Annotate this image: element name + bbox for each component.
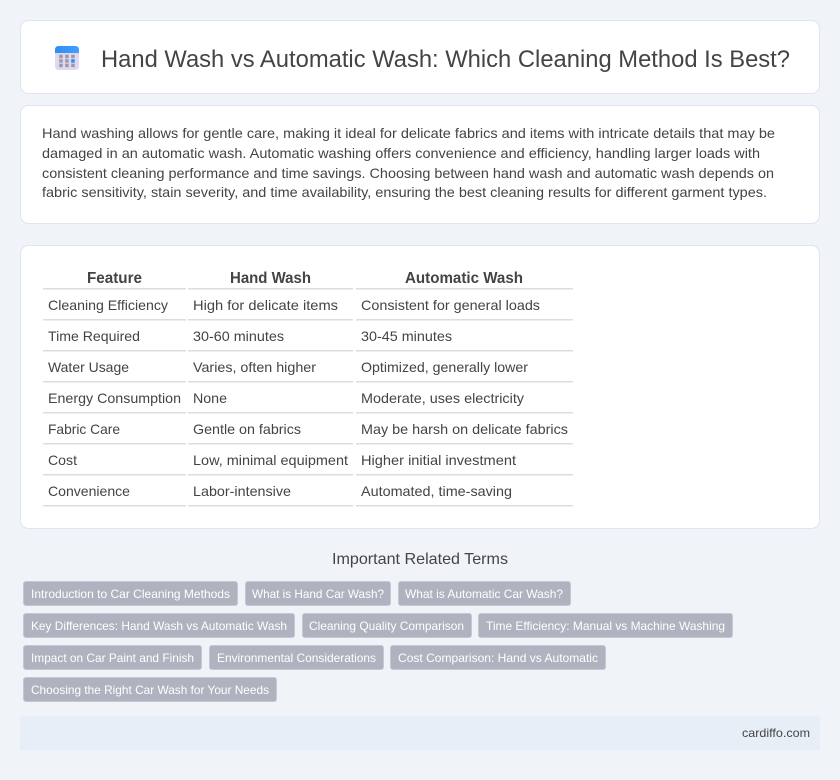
tag: Cost Comparison: Hand vs Automatic	[398, 651, 598, 665]
row: time required: 30-45 minutes	[361, 328, 452, 344]
row: convenience: Automated, time-saving	[361, 483, 512, 499]
row: cleaning efficiency: Cleaning Efficiency	[48, 297, 168, 313]
row: time required	[48, 328, 452, 344]
icon: calendar	[55, 46, 79, 70]
title: Hand Wash vs Automatic Wash: Which Cleaning Method Is Best?	[101, 46, 790, 73]
row: convenience	[48, 483, 512, 499]
table header	[87, 270, 523, 287]
row: energy consumption: Energy Consumption	[48, 390, 181, 406]
row: time required: 30-60 minutes	[193, 328, 284, 344]
tag: Choosing the Right Car Wash for Your Needs	[31, 683, 269, 697]
footer text: cardiffo.com: cardiffo.com	[742, 726, 810, 740]
tag: What is Automatic Car Wash?	[405, 587, 563, 601]
row: cleaning efficiency: Consistent for general loads	[361, 297, 540, 313]
panel: comparison table	[20, 246, 820, 528]
row: energy consumption: None	[193, 390, 227, 406]
row: fabric care	[48, 421, 568, 437]
panel: related term tags	[24, 582, 732, 702]
table header: Feature	[87, 270, 142, 287]
tag: Introduction to Car Cleaning Methods	[31, 587, 230, 601]
row: energy consumption: Moderate, uses electricity	[361, 390, 524, 406]
text block: paragraph: Hand washing allows for gentle care, making it ideal for delicate fabrics and items with intricate details that may be	[42, 125, 775, 141]
row: cleaning efficiency	[48, 297, 540, 313]
tag	[398, 582, 570, 606]
tag	[246, 582, 390, 606]
row: water usage: Varies, often higher	[193, 359, 316, 375]
row: water usage: Optimized, generally lower	[361, 359, 528, 375]
table rules	[43, 289, 573, 506]
tag	[478, 614, 732, 638]
row: cost: Low, minimal equipment	[193, 452, 348, 468]
tag	[24, 678, 276, 702]
panel: title header	[20, 20, 820, 94]
text block: paragraph	[42, 125, 775, 200]
row: cost: Higher initial investment	[361, 452, 516, 468]
footer	[20, 716, 820, 750]
row: time required: Time Required	[48, 328, 140, 344]
tag: Environmental Considerations	[217, 651, 376, 665]
row: cost	[48, 452, 516, 468]
tag	[24, 646, 202, 670]
tag: What is Hand Car Wash?	[252, 587, 384, 601]
tag	[24, 582, 238, 606]
tag: Key Differences: Hand Wash vs Automatic Wash	[31, 619, 287, 633]
table header: Hand Wash	[230, 270, 311, 287]
row: water usage: Water Usage	[48, 359, 129, 375]
text block: paragraph: consistent cleaning performance and time savings. Choosing between hand wash and automatic wash depends on	[42, 165, 774, 181]
tag	[24, 614, 294, 638]
row: cleaning efficiency: High for delicate items	[193, 297, 338, 313]
row: fabric care: Gentle on fabrics	[193, 421, 301, 437]
row: convenience: Convenience	[48, 483, 130, 499]
tag	[210, 646, 384, 670]
row: fabric care: May be harsh on delicate fabrics	[361, 421, 568, 437]
tag	[302, 614, 472, 638]
tag: Impact on Car Paint and Finish	[31, 651, 194, 665]
heading: important related terms: Important Related Terms	[332, 551, 508, 568]
row: cost: Cost	[48, 452, 77, 468]
row: fabric care: Fabric Care	[48, 421, 120, 437]
tag: Time Efficiency: Manual vs Machine Washing	[486, 619, 725, 633]
table header: Automatic Wash	[405, 270, 523, 287]
row: water usage	[48, 359, 528, 375]
text block: paragraph: damaged in an automatic wash. Automatic washing offers convenience and efficiency, handling larger loads with	[42, 145, 760, 161]
tag	[390, 646, 606, 670]
tag: Cleaning Quality Comparison	[309, 619, 464, 633]
row: energy consumption	[48, 390, 524, 406]
text block: paragraph: fabric sensitivity, stain severity, and time availability, ensuring the best cleaning results for different garment types.	[42, 184, 767, 200]
panel: introduction paragraph	[20, 106, 820, 224]
row: convenience: Labor-intensive	[193, 483, 291, 499]
